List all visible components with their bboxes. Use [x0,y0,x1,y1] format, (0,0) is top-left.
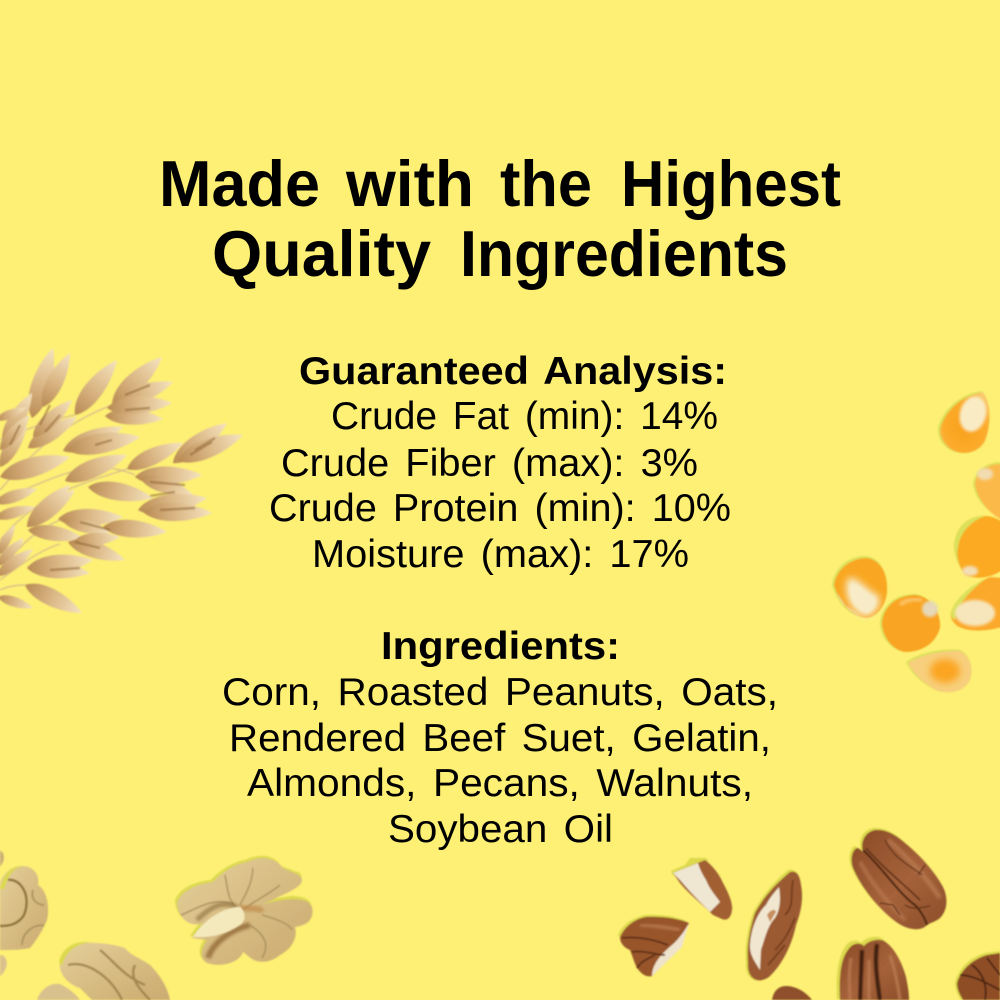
pecan bottom centre [837,937,909,1000]
walnut bottom [37,942,170,1000]
icon: corn kernels [832,391,1000,692]
ingredients block [222,625,778,851]
title: Highest [621,147,841,220]
title: the [500,147,592,220]
ingredients list [222,671,778,851]
pecan half with pale flesh [746,870,802,980]
corn kernel centre [880,594,940,652]
pecan triangular piece [671,858,732,920]
ingredients list: Corn, Roasted Peanuts, Oats, [222,671,778,714]
corn kernel top right [938,391,990,453]
corn kernel right edge upper [973,462,1000,520]
ingredients list: Almonds, Pecans, Walnuts, [247,762,753,805]
icon: oat sprig [0,345,246,620]
title: Quality [212,217,431,290]
ingredients heading: Ingredients: [381,625,620,668]
ingredients list: Rendered Beef Suet, Gelatin, [229,717,771,760]
title: with [345,147,474,220]
title: Made [159,147,320,220]
ingredients list: Soybean Oil [388,808,613,851]
icon: walnuts [0,851,313,1000]
icon: pecans [618,828,1000,1000]
pecan small bottom [772,986,812,1000]
analysis values: Moisture (max): 17% [312,533,689,576]
pecan right edge [955,951,1000,1000]
corn kernel right edge middle [954,516,1000,578]
analysis values: Crude Fiber (max): 3% [281,442,698,485]
corn kernel centre left [832,556,887,618]
analysis values: Crude Fat (min): 14% [331,395,718,438]
analysis values: Crude Protein (min): 10% [269,487,731,530]
pecan large top right [850,828,946,929]
corn kernel right edge lower [951,577,1000,631]
title [159,147,841,290]
guaranteed analysis block [269,350,731,576]
analysis values [269,395,731,576]
title: Ingredients [460,217,788,290]
corn kernel bottom [906,650,972,692]
pecan piece left [618,915,689,977]
walnut half centre [175,856,313,965]
walnut left edge [0,851,48,976]
guaranteed analysis heading: Guaranteed Analysis: [299,350,727,393]
